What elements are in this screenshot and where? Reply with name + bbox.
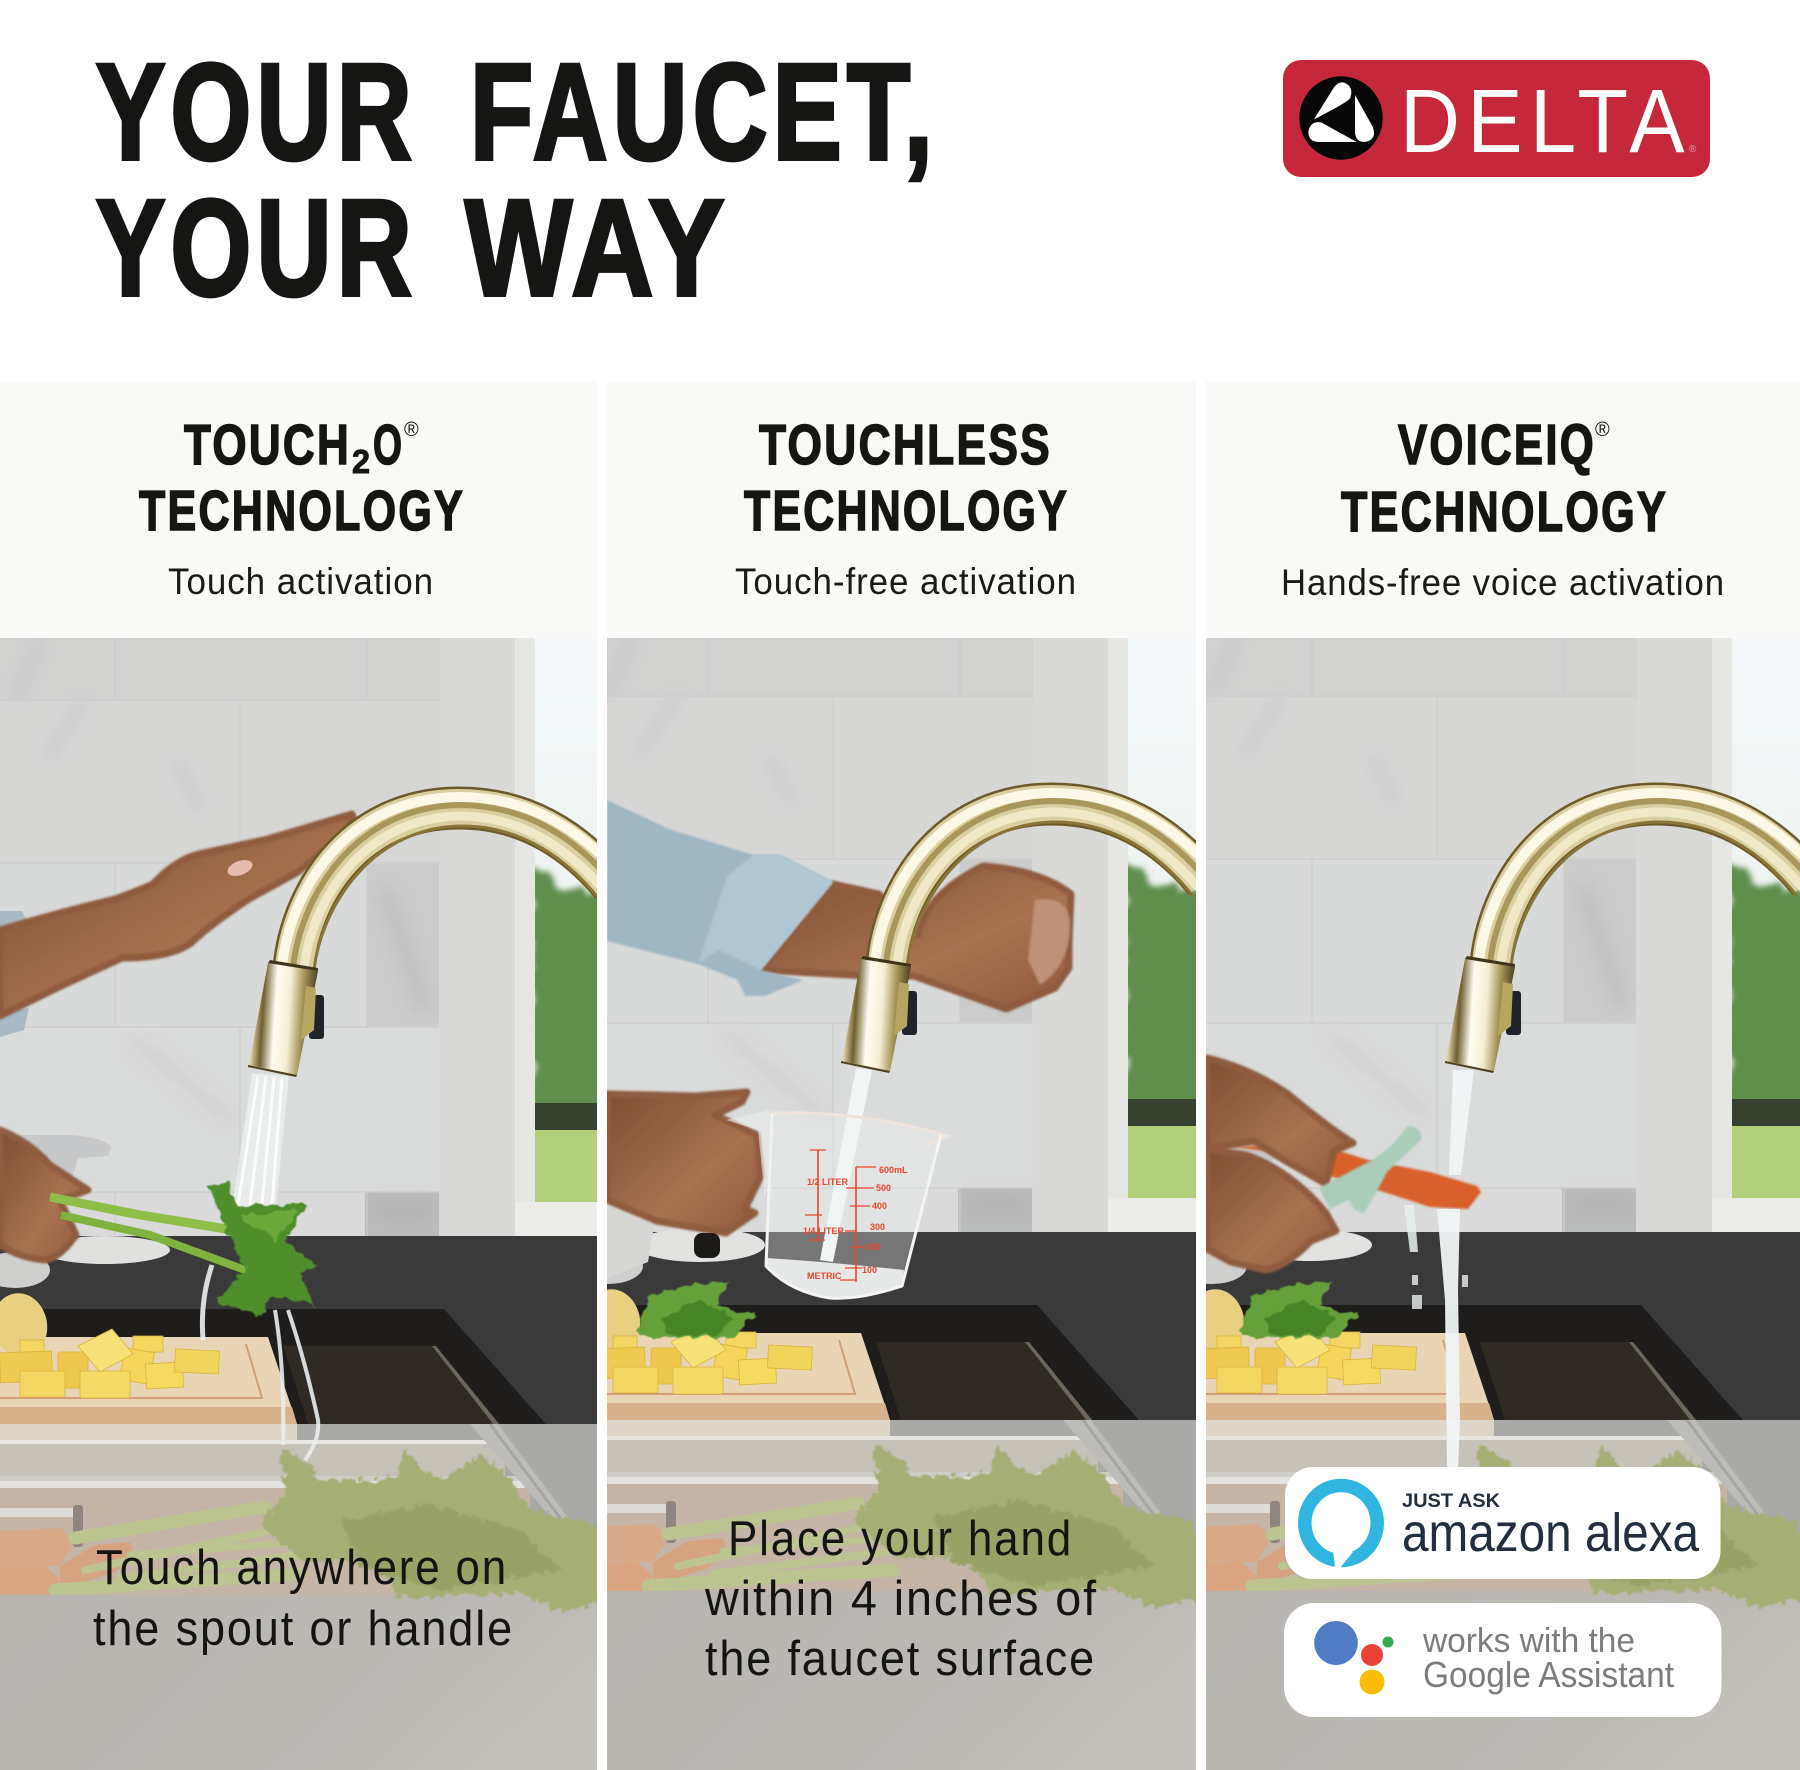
title: YOUR	[96, 36, 417, 189]
upper hand	[1207, 1058, 1353, 1184]
badge: Google Assistant: Google Assistant	[1423, 1654, 1674, 1695]
caption: Touchless: within 4 inches of	[704, 1572, 1098, 1626]
heading: Touch2O Technology	[139, 413, 465, 543]
Delta logo: ®	[1689, 144, 1697, 155]
celery greens	[1239, 1282, 1356, 1337]
upper water stream	[1449, 1070, 1474, 1175]
panel: VoiceIQ technology header	[1206, 381, 1800, 638]
icon: Google Assistant dots	[1314, 1621, 1394, 1694]
heading: Touchless Technology: TECHNOLOGY	[744, 479, 1069, 543]
measuring cup: 100	[862, 1265, 877, 1275]
measuring cup: 200	[866, 1242, 881, 1252]
measuring cup: METRIC	[807, 1271, 842, 1281]
heading: Touch2O Technology: TOUCH	[184, 413, 351, 477]
caption: Touchless: the faucet surface	[705, 1632, 1096, 1686]
heading: Touchless Technology: TOUCHLESS	[759, 413, 1052, 477]
kitchen background	[607, 638, 1196, 1770]
badge: Google Assistant	[1284, 1603, 1722, 1717]
lower water stream	[1404, 1205, 1468, 1470]
hand holding cup	[607, 1092, 761, 1233]
heading: Touchless Technology	[744, 413, 1069, 543]
panel: Touch2O photo	[0, 630, 650, 1770]
lower hand	[1207, 1149, 1336, 1270]
title: WAY	[465, 172, 730, 325]
measuring cup	[726, 1110, 948, 1298]
faucet	[248, 797, 618, 1077]
bowl and plate	[607, 1230, 765, 1264]
badge: Amazon Alexa	[1285, 1467, 1720, 1579]
caption: Touch2O: Touch anywhere on	[96, 1541, 508, 1595]
peeler	[1319, 1126, 1422, 1212]
title: FAUCET,	[470, 36, 938, 189]
panel: Touch2O technology header	[0, 381, 597, 638]
badge: Amazon Alexa: JUST ASK	[1402, 1491, 1500, 1512]
heading: VoiceIQ Technology: TECHNOLOGY	[1341, 480, 1668, 544]
icon: Alexa ring	[1305, 1486, 1377, 1568]
measuring cup: 400	[872, 1201, 887, 1211]
title: YOUR	[96, 172, 417, 325]
subheading: Hands-free voice activation	[1281, 562, 1725, 603]
heading: Touch2O Technology: 2	[352, 443, 370, 480]
measuring cup: 300	[870, 1222, 885, 1232]
heading: VoiceIQ Technology	[1341, 413, 1668, 544]
denim sleeve	[607, 800, 833, 996]
subheading: Touch-free activation	[735, 561, 1077, 602]
celery	[50, 1182, 316, 1317]
measuring cup: 1/2 LITER	[807, 1177, 849, 1187]
Delta logo: DELTA	[1400, 72, 1692, 172]
water stream	[820, 1068, 872, 1262]
arm and hand behind faucet	[761, 866, 1071, 1009]
faucet	[841, 793, 1211, 1073]
badge: Amazon Alexa: amazon alexa	[1402, 1503, 1700, 1563]
carrot	[1234, 1143, 1481, 1209]
plate	[1248, 1229, 1372, 1261]
heading: VoiceIQ Technology: ®	[1595, 419, 1610, 441]
measuring cup: 600mL	[879, 1165, 908, 1175]
water spray	[232, 1073, 289, 1207]
faucet	[1445, 793, 1800, 1073]
panel: Touchless photo	[607, 638, 1196, 1770]
badge: Google Assistant: works with the	[1422, 1622, 1635, 1660]
Delta logo	[1283, 60, 1710, 177]
heading: Touch2O Technology: ®	[404, 419, 419, 441]
kitchen background	[0, 630, 650, 1770]
hand touching spout	[0, 814, 354, 1037]
heading: Touch2O Technology: TECHNOLOGY	[139, 479, 465, 543]
panel: Touchless technology header	[607, 381, 1196, 638]
peg	[694, 1233, 720, 1258]
icon: Delta triangle mark	[1299, 76, 1383, 160]
measuring cup: 500	[876, 1183, 891, 1193]
heading: VoiceIQ Technology: VOICEIQ	[1398, 413, 1596, 477]
caption: Touch2O	[93, 1541, 514, 1656]
celery greens	[636, 1282, 753, 1337]
hand holding celery	[0, 1130, 88, 1260]
caption: Touch2O: the spout or handle	[93, 1602, 514, 1656]
title	[96, 36, 938, 325]
subheading: Touch activation	[168, 561, 434, 602]
falling water	[202, 1265, 318, 1460]
caption: Touchless: Place your hand	[728, 1512, 1073, 1566]
measuring cup: 1/4 LITER	[803, 1226, 845, 1236]
panel: VoiceIQ photo	[1177, 626, 1800, 1770]
heading: Touch2O Technology: O	[373, 413, 402, 477]
kitchen background	[1177, 626, 1800, 1770]
caption: Touchless	[704, 1512, 1098, 1686]
